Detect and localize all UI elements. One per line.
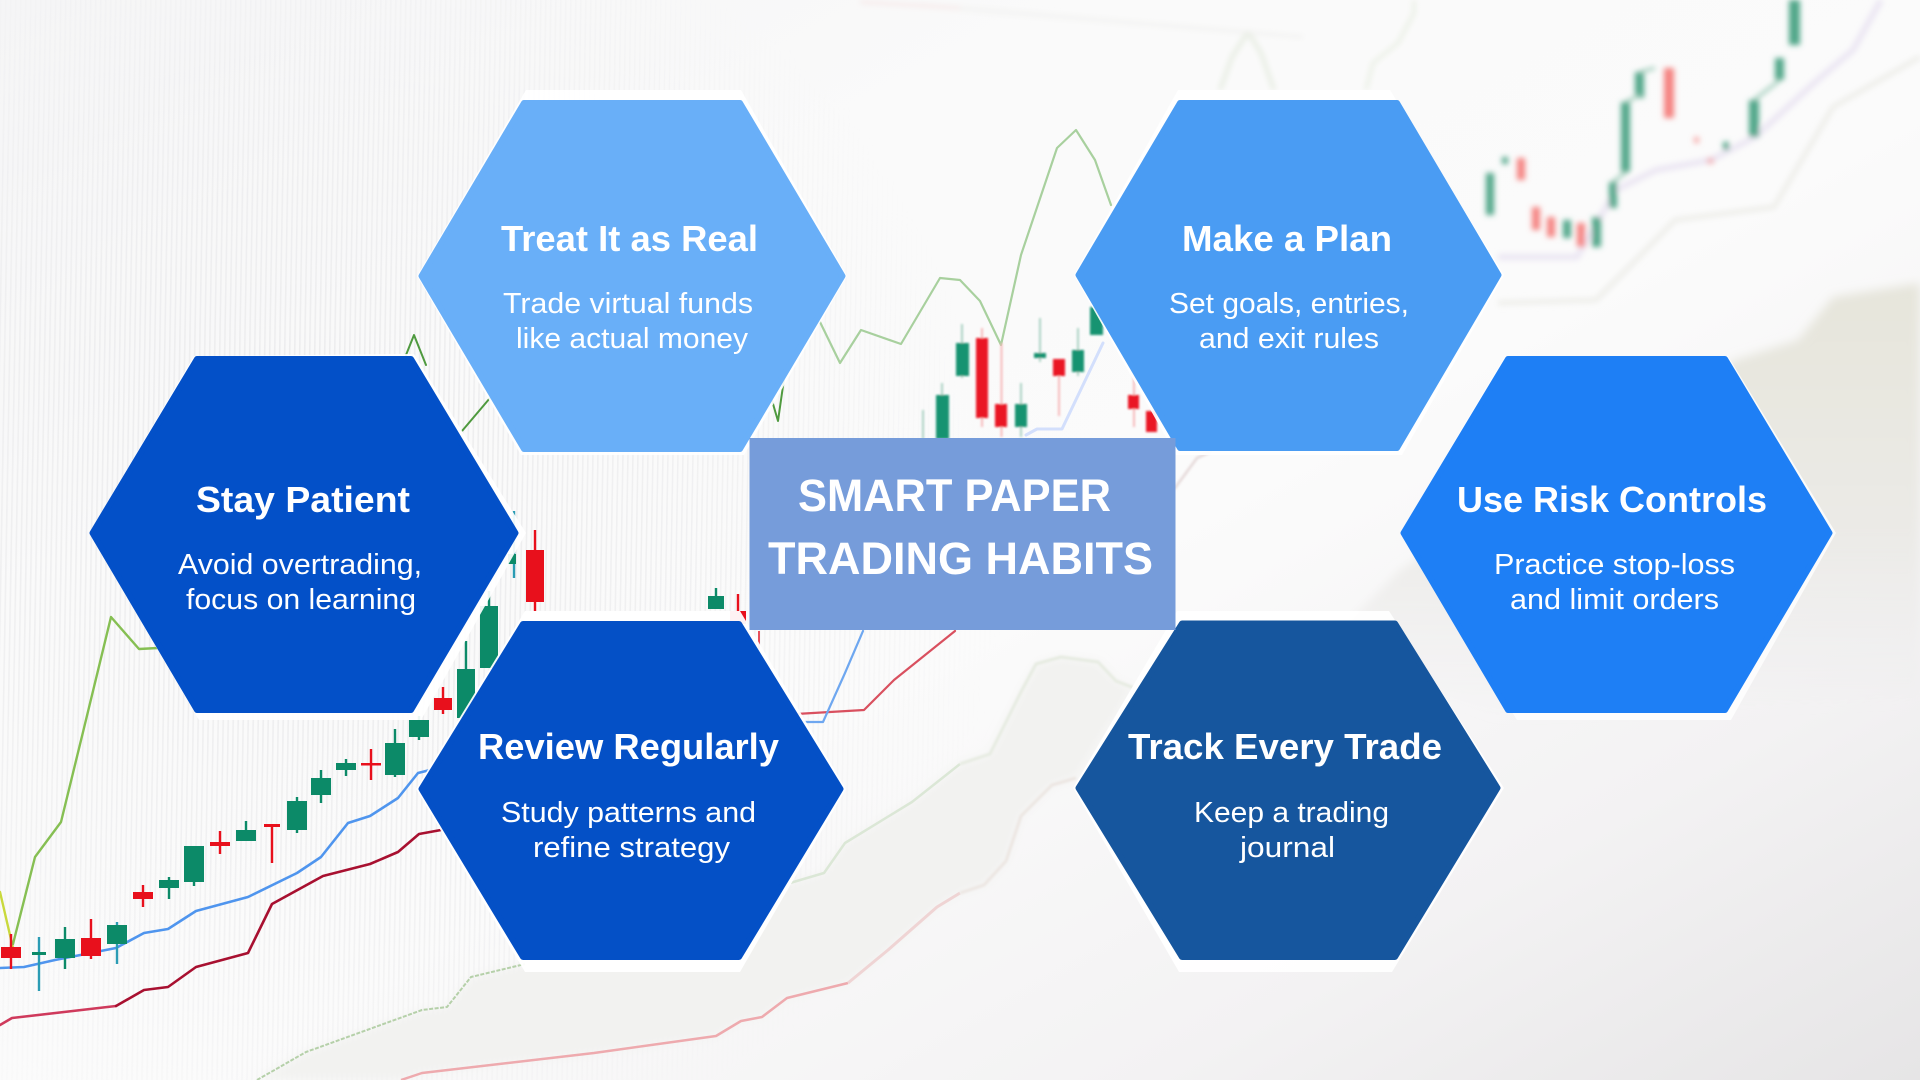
text: Stay Patient description <box>178 549 422 616</box>
text: Make a Plan description: and exit rules <box>1199 323 1379 355</box>
chart: sharp candlesticks left <box>1 511 759 991</box>
hexagon: Treat It as Real <box>417 90 847 455</box>
text: Review Regularly description: Study patterns and <box>501 797 756 829</box>
chart: lower faint lines <box>257 657 1134 1080</box>
heading: Treat It as Real: Treat It as Real <box>501 218 758 259</box>
hexagon: Use Risk Controls <box>1400 356 1836 720</box>
text: Review Regularly description: refine strategy <box>533 832 731 864</box>
heading: Use Risk Controls: Use Risk Controls <box>1457 479 1767 520</box>
text: Treat It as Real description <box>503 288 753 355</box>
text: Review Regularly description <box>501 797 756 864</box>
title: Smart Paper Trading Habits: TRADING HABITS <box>768 533 1153 584</box>
chart: center candlesticks <box>923 307 1157 439</box>
text: Treat It as Real description: Trade virtual funds <box>503 288 753 320</box>
text: Use Risk Controls description: and limit orders <box>1510 584 1719 616</box>
text: Track Every Trade description: journal <box>1239 832 1335 864</box>
chart: sharp moving average lines <box>0 130 1210 1025</box>
title: Smart Paper Trading Habits <box>768 470 1153 584</box>
text: Make a Plan description <box>1169 288 1409 355</box>
text: Make a Plan description: Set goals, entries, <box>1169 288 1409 320</box>
text: Use Risk Controls description: Practice stop-loss <box>1494 549 1735 581</box>
heading: Make a Plan: Make a Plan <box>1182 218 1392 259</box>
title panel <box>750 438 1176 630</box>
text: Stay Patient description: Avoid overtrading, <box>178 549 422 581</box>
heading: Review Regularly: Review Regularly <box>478 726 779 767</box>
hexagon: Track Every Trade <box>1073 611 1504 972</box>
text: Stay Patient description: focus on learning <box>186 584 416 616</box>
hexagon: Stay Patient <box>89 354 526 720</box>
hexagon: Make a Plan <box>1074 90 1504 455</box>
chart: blurred right candlesticks and lines <box>860 0 1920 303</box>
heading: Track Every Trade: Track Every Trade <box>1128 726 1442 767</box>
text: Treat It as Real description: like actual money <box>516 323 749 355</box>
title: Smart Paper Trading Habits: SMART PAPER <box>798 470 1111 521</box>
hexagon: Review Regularly <box>416 611 846 972</box>
heading: Stay Patient: Stay Patient <box>196 479 410 520</box>
text: Use Risk Controls description <box>1494 549 1735 616</box>
text: Track Every Trade description <box>1194 797 1389 864</box>
text: Track Every Trade description: Keep a trading <box>1194 797 1389 829</box>
